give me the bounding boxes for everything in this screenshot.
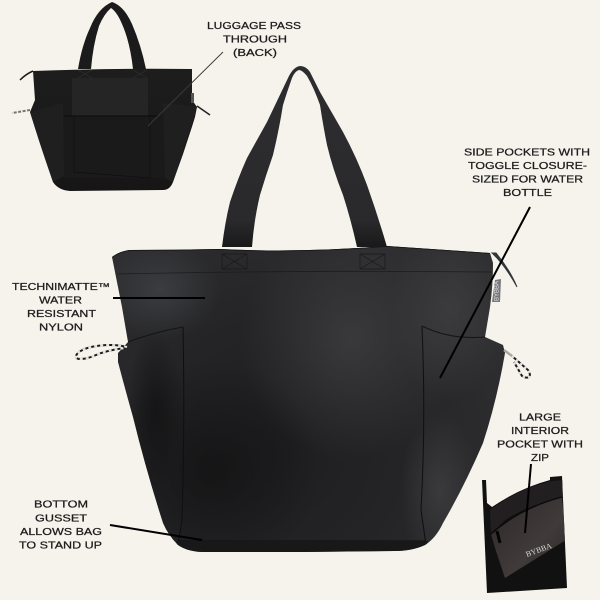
callout: luggage pass through: (BACK) [233, 48, 277, 59]
bag body [112, 246, 505, 552]
callout: interior pocket: ZIP [531, 453, 549, 464]
leader line: technimatte [113, 297, 205, 299]
brand tag: BYBBA [494, 281, 500, 301]
callout: technimatte nylon: TECHNIMATTE™ [12, 282, 110, 293]
callout: bottom gusset: TO STAND UP [19, 540, 102, 552]
callout: technimatte nylon [12, 282, 110, 334]
callout: bottom gusset: GUSSET [35, 514, 87, 524]
callout: technimatte nylon: RESISTANT [27, 309, 96, 320]
zipper pull [492, 253, 517, 287]
icon: left toggle cord [76, 345, 127, 359]
brand logo: BYBBA [525, 541, 553, 559]
body shading and seams [112, 246, 492, 552]
callout: side pockets: SIDE POCKETS WITH [464, 148, 590, 158]
callout: luggage pass through: LUGGAGE PASS [207, 21, 301, 32]
leader line: luggage pass through [148, 52, 223, 126]
callout: interior pocket: POCKET WITH [497, 440, 583, 450]
small back-view bag photo [12, 2, 210, 191]
callout: luggage pass through [207, 21, 301, 59]
callout: bottom gusset: BOTTOM [34, 500, 88, 510]
icon: right toggle clip [504, 350, 530, 378]
inset photo: interior pocket [482, 476, 567, 593]
callout: interior pocket: INTERIOR [511, 426, 569, 437]
callout: side pockets: SIZED FOR WATER [472, 174, 583, 186]
main tote bag photo [76, 66, 530, 580]
leader line: bottom gusset [110, 525, 202, 540]
callout: bottom gusset: ALLOWS BAG [20, 527, 102, 538]
callout: side pockets: BOTTLE [503, 188, 552, 199]
callout: bottom gusset [19, 500, 102, 552]
callout: luggage pass through: THROUGH [223, 34, 287, 46]
callout: technimatte nylon: WATER [39, 296, 82, 306]
callout: side pockets [464, 148, 590, 199]
leader line: interior pocket [525, 464, 531, 533]
callout: interior pocket: LARGE [519, 412, 561, 424]
icon: bag handle [222, 66, 387, 247]
callout: side pockets: TOGGLE CLOSURE- [468, 161, 587, 172]
brand tag [492, 279, 501, 302]
callout: technimatte nylon: NYLON [39, 322, 83, 334]
leader line: side pockets [440, 207, 530, 378]
callout: interior pocket [497, 412, 583, 464]
